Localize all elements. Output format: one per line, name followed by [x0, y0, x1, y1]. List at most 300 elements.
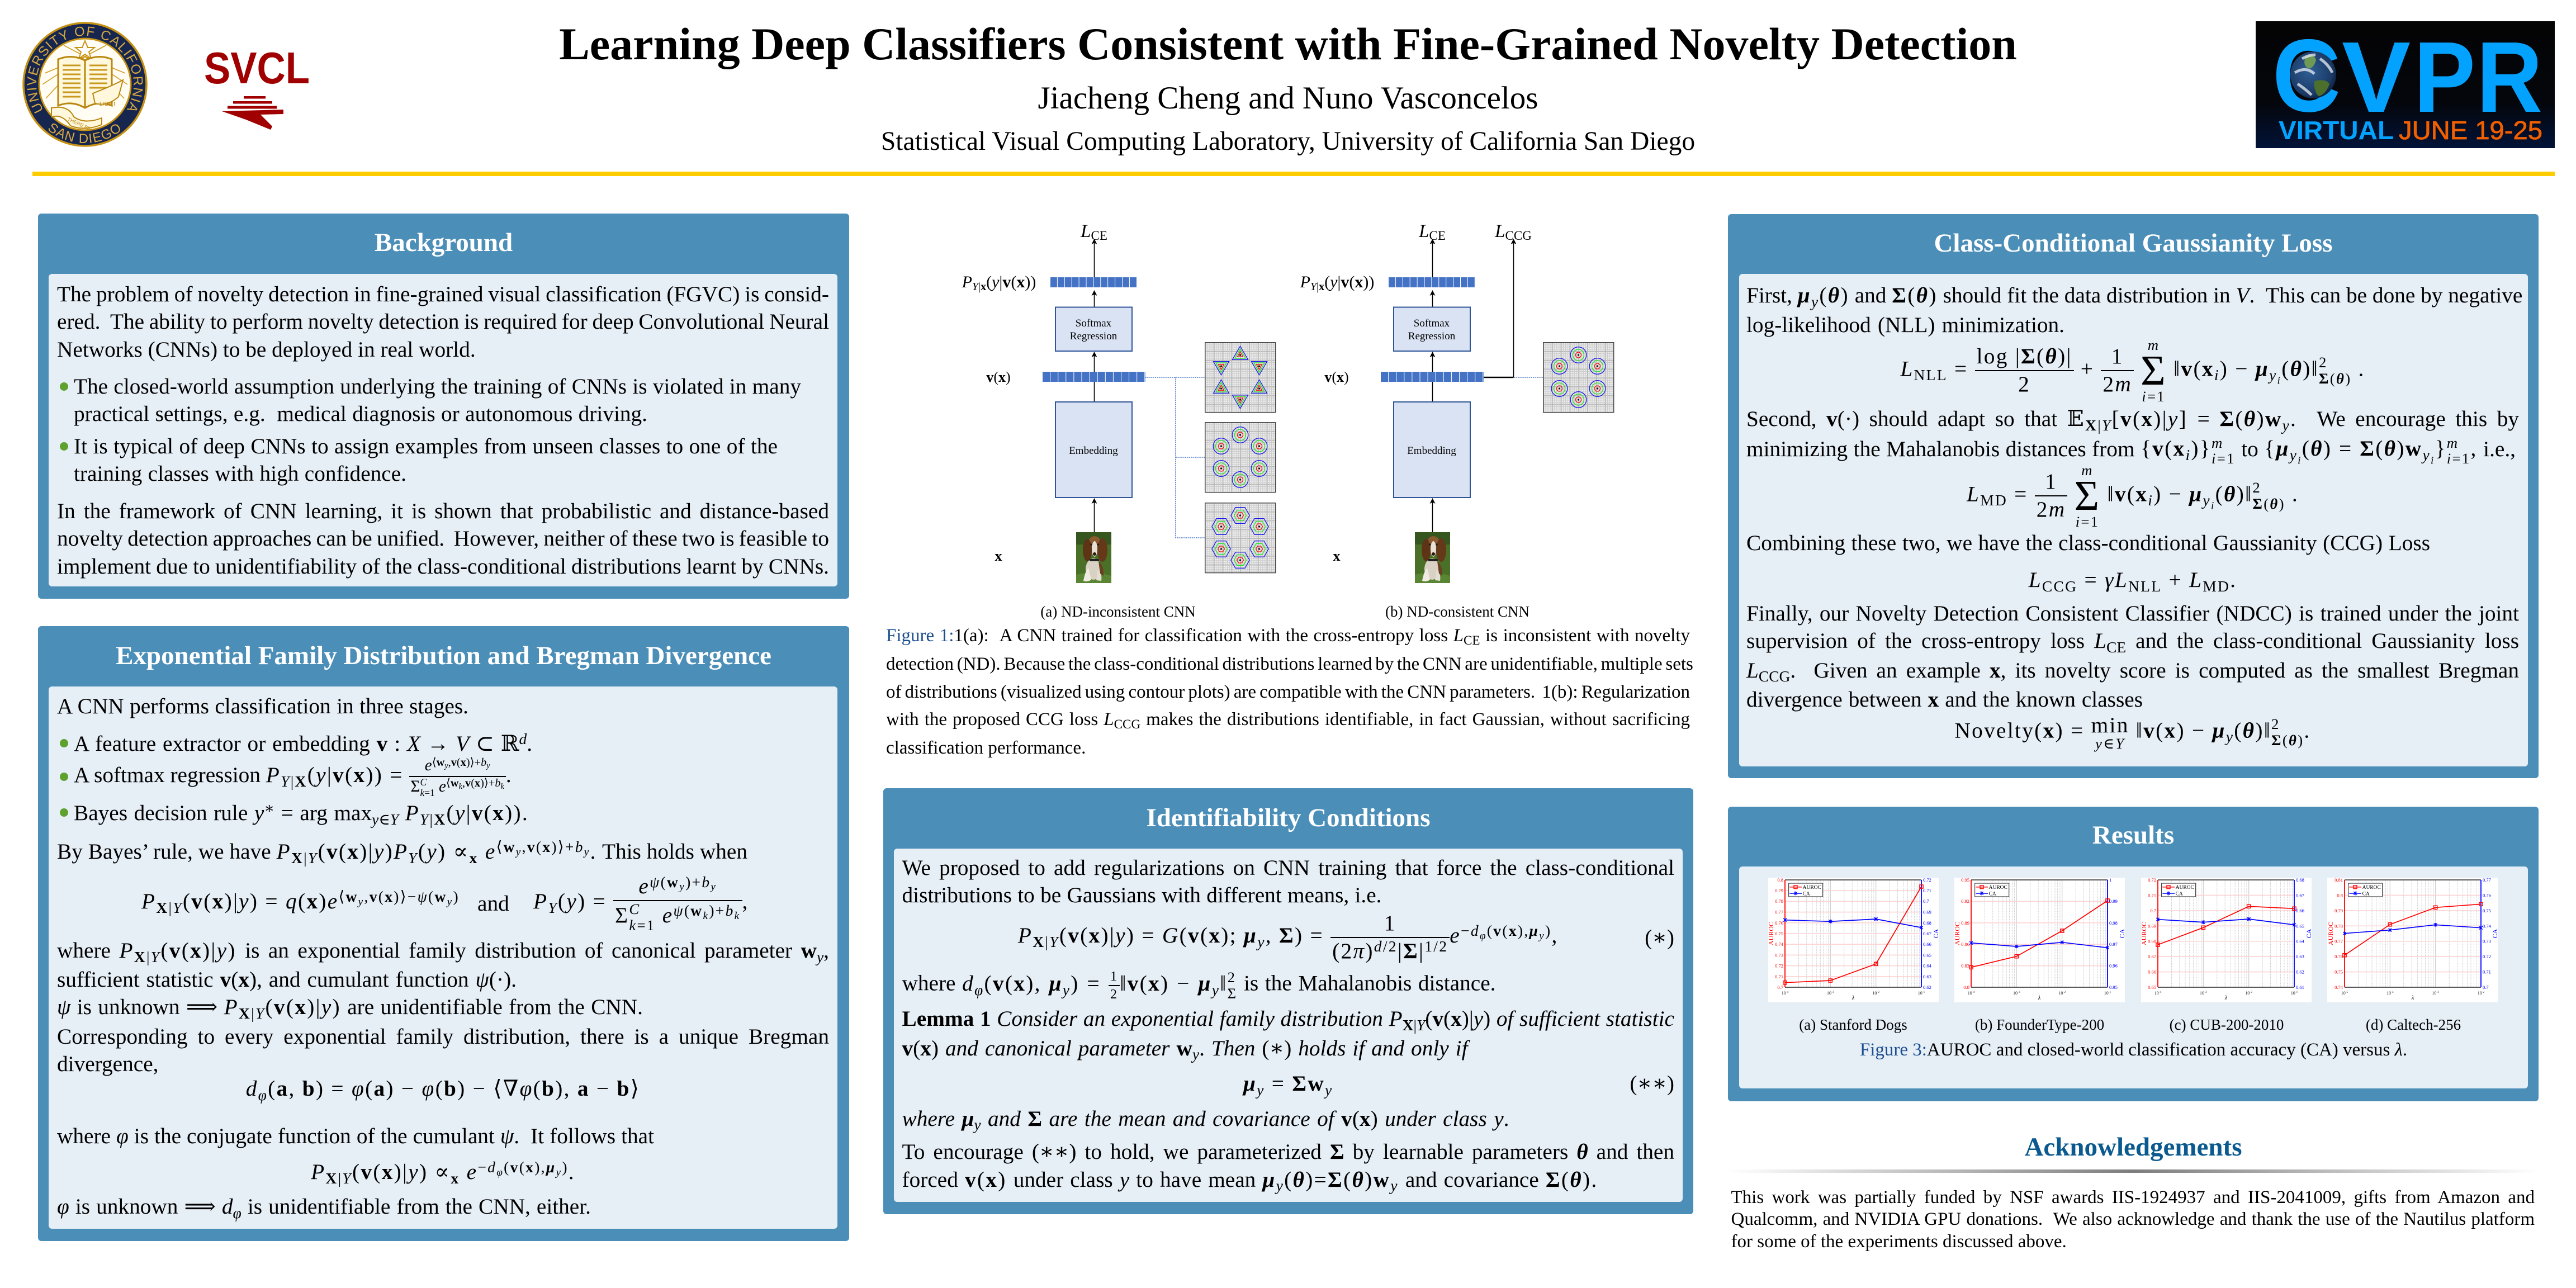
equation: mean condition (**): μy = Σwy: [1243, 1071, 1333, 1098]
equation: novelty score: y∈Y: [2095, 735, 2125, 752]
panel: Exponential Family Distribution and Bregman Divergence: eψ(wy)+by: [638, 873, 717, 898]
chart: Stanford Dogs: 0.62: [1923, 984, 1931, 990]
equation: Bregman divergence: dφ(a, b) = φ(a) − φ(b) − ⟨∇φ(b), a − b⟩: [246, 1076, 640, 1104]
chart: Stanford Dogs: 0.74: [1775, 941, 1784, 947]
text: NDCC training: [1746, 600, 2519, 714]
diagram: ND-inconsistent CNN: Y: [972, 281, 979, 293]
text: regularization proposal: [902, 854, 1674, 910]
chart: Caltech-256: 0.76: [2483, 892, 2491, 898]
text: introduction: The problem of novelty detection in fine-grained visual classification (FGVC) is consid-: [57, 282, 829, 306]
chart: FounderType-200: -1: [2109, 991, 2111, 994]
equation: Gaussian class-conditional (*): (∗): [1645, 925, 1674, 950]
chart: FounderType-200: 10: [2104, 991, 2109, 996]
chart: Stanford Dogs: 0.71: [1775, 974, 1783, 979]
equation: NLL loss: 2: [2319, 354, 2328, 371]
logo: UC San Diego seal: SAN DIEGO: [48, 123, 120, 143]
chart: FounderType-200: AUROC: [1953, 922, 1961, 945]
text: Lemma 1: Lemma 1 Consider an exponential family distribution PX|Y(v(x)|y) of sufficient statistic: [902, 1006, 1674, 1034]
diagram: ND-consistent CNN: CCG: [1505, 229, 1532, 243]
equation: MD loss: [1746, 482, 2519, 510]
chart: Caltech-256: 0.76: [2334, 954, 2343, 959]
equation: MD loss: Σ: [2075, 472, 2100, 519]
equation: mean condition (**): [902, 1069, 1674, 1100]
chart: FounderType-200: λ: [2038, 995, 2041, 1001]
panel: Class-Conditional Gaussianity Loss: [1728, 214, 2539, 778]
diagram: ND-consistent CNN: |x: [1317, 281, 1324, 293]
chart: Caltech-256: -2: [2482, 991, 2485, 994]
diagram: ND-consistent CNN: P: [1300, 273, 1310, 291]
chart: CUB-200-2010: 0.65: [2296, 923, 2304, 929]
text: introduction: ered. The ability to perform novelty detection is required for deep Convolutional Neural: [57, 309, 829, 334]
chart: CUB-200-2010: 0.64: [2296, 939, 2305, 944]
equation: novelty score: 2: [2271, 716, 2280, 732]
chart: CUB-200-2010: 0.63: [2296, 954, 2304, 959]
text: negative log-likelihood: First, μy(θ) and Σ(θ) should fit the data distribution in V. This can be done by negative: [1746, 283, 2522, 310]
chart: FounderType-200: 0.98: [2109, 920, 2118, 926]
equation: NLL loss: LNLL = + ‖v(xi) − μyi(θ)‖ .: [1900, 356, 2365, 386]
chart: CUB-200-2010: 0.72: [2148, 877, 2156, 883]
caption: chart (c): (c) CUB-200-2010: [2170, 1016, 2284, 1033]
text: introduction: [57, 282, 829, 361]
heading: Class-Conditional Gaussianity Loss: Class-Conditional Gaussianity Loss: [1934, 229, 2333, 258]
equation: novelty score: [1746, 718, 2519, 746]
caption: Figure 1: classification performance.: [886, 738, 1086, 758]
equation: class prior: PY(y) = ,: [533, 889, 749, 916]
panel: Results: [1728, 807, 2539, 1101]
chart: Caltech-256: 0.7: [2483, 984, 2489, 990]
chart: FounderType-200: -4: [1972, 991, 1975, 994]
chart: CUB-200-2010: CA: [2305, 929, 2313, 938]
equation: novelty score: Σ(θ): [2271, 732, 2304, 749]
diagram: ND-inconsistent CNN: Embedding: [1069, 445, 1118, 457]
chart: FounderType-200: 0.86: [1961, 941, 1969, 947]
equation: NLL loss: [1746, 357, 2519, 385]
bullet: softmax regression: C: [420, 776, 427, 788]
chart: Stanford Dogs: 10: [1918, 991, 1922, 996]
bullet: softmax regression: e⟨wy,v(x)⟩+by: [425, 756, 490, 774]
chart: CUB-200-2010: AUROC: [2140, 922, 2148, 945]
diagram: ND-consistent CNN: Embedding: [1407, 445, 1456, 457]
panel: Class-Conditional Gaussianity Loss: i=1: [2142, 388, 2166, 405]
chart: Stanford Dogs: 0.76: [1775, 920, 1783, 926]
panel: Background: [38, 214, 849, 599]
bullet: softmax regression: Σ e⟨wk,v(x)⟩+bk: [410, 777, 504, 795]
text: Mahalanobis minimization: [1746, 405, 2519, 470]
equation: MD loss: 2m: [2037, 497, 2066, 522]
text: exponential family explanation: divergence,: [57, 1052, 158, 1076]
text: negative log-likelihood: [1746, 282, 2519, 339]
text: Mahalanobis distance: 1: [1110, 969, 1118, 984]
diagram: ND-consistent CNN: Softmax: [1414, 318, 1450, 329]
chart: Stanford Dogs: 0.64: [1923, 963, 1932, 969]
logo: CVPR virtual June 19-25: JUNE 19-25: [2399, 116, 2542, 145]
text: acknowledgement body: This work was partially funded by NSF awards IIS-1924937 and IIS-2041009, gifts from Amazon and: [1731, 1187, 2535, 1208]
chart: FounderType-200: 0.96: [2109, 963, 2118, 969]
chart: Caltech-256: 0.81: [2334, 877, 2343, 883]
diagram: ND-inconsistent CNN: v(x): [986, 369, 1011, 385]
diagram: ND-consistent CNN: CE: [1429, 229, 1446, 243]
chart: Caltech-256: [2327, 878, 2498, 1002]
chart: FounderType-200: 0.99: [2109, 898, 2118, 904]
chart: FounderType-200: 0.8: [1963, 984, 1969, 990]
chart: FounderType-200: CA: [1989, 891, 1996, 897]
panel: Class-Conditional Gaussianity Loss: 1: [2111, 344, 2124, 368]
text: acknowledgement body: Qualcomm, and NVIDIA GPU donations. We also acknowledge and thank the use of the Nautilus platform: [1731, 1209, 2535, 1229]
caption: Figure 1: detection (ND). Because the class-conditional distributions learned by the CNN are unidentifiable, multiple sets: [886, 654, 1693, 674]
panel: Identifiability Conditions: 1: [1384, 911, 1396, 935]
caption: subfigure (a): (a) ND-inconsistent CNN: [1040, 603, 1196, 620]
chart: Caltech-256: 0.8: [2337, 892, 2343, 898]
caption: chart (d): (d) Caltech-256: [2366, 1016, 2461, 1033]
diagram: ND-consistent CNN: L: [1494, 221, 1505, 242]
equation: proportional form: PX|Y(v(x)|y) ∝x e−dφ(v(x),μy).: [311, 1158, 575, 1187]
chart: Stanford Dogs: 0.8: [1777, 877, 1783, 883]
panel: Class-Conditional Gaussianity Loss: m: [2081, 462, 2094, 479]
heading: Acknowledgements: Acknowledgements: [2024, 1133, 2242, 1162]
bullet: closed-world assumption: The closed-world assumption underlying the training of CNNs is violated in many: [74, 373, 801, 398]
chart: Caltech-256: 0.77: [2334, 939, 2343, 944]
chart: Caltech-256: CA: [2362, 891, 2370, 897]
text: lemma conclusion: where μy and Σ are the mean and covariance of v(x) under class y.: [902, 1106, 1509, 1133]
text: framework: [57, 499, 829, 578]
chart: Caltech-256: 0.74: [2334, 984, 2343, 990]
text: learnable parameters: To encourage (∗∗) to hold, we parameterized Σ by learnable parameters θ and then: [902, 1139, 1674, 1164]
equation: NLL loss: Σ: [2141, 347, 2167, 394]
chart: Stanford Dogs: CA: [1803, 891, 1810, 897]
chart: Stanford Dogs: 10: [1872, 991, 1877, 996]
caption: subfigure (b): (b) ND-consistent CNN: [1385, 603, 1530, 620]
chart: CUB-200-2010: 0.67: [2148, 954, 2156, 959]
chart: Stanford Dogs: 0.72: [1923, 877, 1931, 883]
chart: CUB-200-2010: 10: [2154, 991, 2159, 996]
chart: FounderType-200: 10: [2058, 991, 2063, 996]
chart: Stanford Dogs: AUROC: [1767, 922, 1775, 945]
chart: Caltech-256: 0.74: [2483, 923, 2492, 929]
bullet: closed-world assumption: [60, 373, 801, 426]
caption: Figure 1: of distributions (visualized using contour plots) are compatible with the CNN parameters. 1(b): Regularization: [886, 682, 1690, 702]
panel: Class-Conditional Gaussianity Loss: m: [2148, 337, 2160, 353]
bullet: high confidence: [60, 434, 778, 486]
chart: Caltech-256: CA: [2491, 929, 2499, 938]
equation: CCG loss: LCCG = γLNLL + LMD.: [2029, 567, 2237, 595]
chart: CUB-200-2010: 0.68: [2296, 877, 2304, 883]
chart: Caltech-256: 0.75: [2334, 969, 2343, 975]
panel: Class-Conditional Gaussianity Loss: 1: [2045, 469, 2057, 494]
chart: CUB-200-2010: -1: [2295, 991, 2298, 994]
diagram: ND-inconsistent CNN: [962, 221, 1276, 583]
text: Mahalanobis distance: 2: [1228, 969, 1236, 986]
chart: FounderType-200: 0.95: [2109, 984, 2118, 990]
equation: exponential family decomposition: PX|Y(v(x)|y) = q(x)e⟨wy,v(x)⟩−ψ(wy): [141, 888, 460, 916]
heading: Identifiability Conditions: Identifiability Conditions: [1146, 803, 1430, 832]
bullet: high confidence: training classes with high confidence.: [74, 461, 406, 486]
panel: Exponential Family Distribution and Bregman Divergence: k=1: [420, 787, 435, 798]
chart: CUB-200-2010: 0.71: [2148, 892, 2156, 898]
diagram: ND-inconsistent CNN: |x: [978, 281, 986, 293]
chart: Caltech-256: 0.78: [2334, 923, 2343, 929]
caption: Figure 3: Figure 3:AUROC and closed-world classification accuracy (CA) versus λ.: [1860, 1040, 2407, 1060]
text: conjugate function: where φ is the conjugate function of the cumulant ψ. It follows that: [57, 1124, 654, 1148]
text: Mahalanobis minimization: minimizing the Mahalanobis distances from {v(xi)} to {μyi(θ) = Σ(θ)wyi} , i.e.,: [1746, 436, 2516, 467]
bullet: closed-world assumption: practical settings, e.g. medical diagnosis or autonomous driving.: [74, 401, 647, 426]
chart: CUB-200-2010: 10: [2200, 991, 2204, 996]
chart: Stanford Dogs: 0.65: [1923, 952, 1931, 958]
equation: NLL loss: Σ(θ): [2319, 370, 2351, 387]
logo: CVPR virtual June 19-25: P: [2414, 21, 2475, 134]
text: NDCC training: divergence between x and the known classes: [1746, 687, 2143, 712]
text: framework: In the framework of CNN learning, it is shown that probabilistic and distance-based: [57, 499, 829, 523]
diagram: ND-consistent CNN: (: [1324, 273, 1330, 291]
chart: Stanford Dogs: -4: [1786, 991, 1789, 994]
text: framework: implement due to unidentifiability of the class-conditional distributions learnt by CNNs.: [57, 553, 829, 578]
chart: Caltech-256: 10: [2478, 991, 2482, 996]
text: combining: Combining these two, we have the class-conditional Gaussianity (CCG) Loss: [1746, 531, 2430, 555]
chart: CUB-200-2010: -4: [2159, 991, 2162, 994]
chart: Stanford Dogs: 0.69: [1923, 910, 1931, 915]
chart: FounderType-200: 0.92: [1961, 898, 1969, 904]
chart: CUB-200-2010: 0.69: [2148, 923, 2156, 929]
bullet: Bayes decision rule: Bayes decision rule y∗ = arg maxy∈Y PY|X(y|v(x)).: [74, 799, 529, 828]
diagram: ND-consistent CNN: L: [1418, 221, 1429, 242]
text: acknowledgement body: for some of the experiments discussed above.: [1731, 1231, 2067, 1251]
bullet: softmax regression: [60, 756, 512, 798]
chart: CUB-200-2010: 0.7: [2150, 908, 2156, 913]
chart: CUB-200-2010: CA: [2176, 891, 2183, 897]
chart: CUB-200-2010: 0.61: [2296, 984, 2304, 990]
text: introduction: Networks (CNNs) to be deployed in real world.: [57, 337, 476, 361]
text: Mahalanobis minimization: Second, v(·) should adapt so that 𝔼X|Y[v(x)|y] = Σ(θ)wy. We encourage this by: [1746, 406, 2519, 434]
chart: FounderType-200: 1: [2109, 877, 2111, 883]
equation: MD loss: Σ(θ): [2252, 495, 2285, 512]
heading: exponential family: Exponential Family Distribution and Bregman Divergence: [116, 641, 771, 670]
logo: UC San Diego seal: UNIVERSITY OF CALIFORNIA: [27, 27, 143, 113]
diagram: ND-consistent CNN: Regression: [1408, 330, 1456, 342]
equation label: and: and: [477, 891, 509, 916]
text: Mahalanobis distance: Σ: [1228, 985, 1237, 1002]
figure: CNN diagrams: [883, 218, 1694, 609]
chart: Caltech-256: 0.79: [2334, 908, 2343, 913]
diagram: ND-inconsistent CNN: x: [995, 548, 1002, 564]
caption: chart (b): (b) FounderType-200: [1975, 1016, 2104, 1033]
chart: CUB-200-2010: -3: [2204, 991, 2207, 994]
chart: Stanford Dogs: 0.72: [1775, 963, 1783, 969]
chart: Stanford Dogs: 0.7: [1777, 984, 1783, 990]
chart: Caltech-256: λ: [2411, 995, 2414, 1001]
section: Acknowledgements: [1728, 1129, 2539, 1258]
diagram: ND-consistent CNN: v(x): [1324, 369, 1349, 385]
diagram: ND-consistent CNN: [1300, 221, 1614, 583]
text: exponential family explanation: Corresponding to every exponential family distribution, there is a unique Bregman: [57, 1024, 829, 1049]
chart: CUB-200-2010: λ: [2224, 995, 2228, 1001]
bullet: softmax regression: A softmax regression PY|X(y|v(x)) = .: [74, 763, 512, 790]
text: Lemma 1: [902, 1005, 1674, 1064]
chart: Stanford Dogs: 0.71: [1923, 888, 1931, 893]
text: NDCC training: Finally, our Novelty Detection Consistent Classifier (NDCC) is trained under the joint: [1746, 601, 2519, 626]
equation: MD loss: 2: [2252, 479, 2261, 496]
diagram: ND-inconsistent CNN: y|v(x)): [992, 273, 1036, 291]
logo: UC San Diego seal: LIGHT: [100, 101, 116, 107]
chart: FounderType-200: -3: [2018, 991, 2020, 994]
text: acknowledgement body: [1731, 1186, 2535, 1253]
chart: Stanford Dogs: -2: [1877, 991, 1879, 994]
chart: CUB-200-2010: [2141, 878, 2312, 1002]
heading: Background: Background: [375, 228, 513, 257]
chart: Caltech-256: -3: [2436, 991, 2439, 994]
equation: Gaussian class-conditional (*): [902, 924, 1674, 951]
text: negative log-likelihood: log-likelihood (NLL) minimization.: [1746, 312, 2064, 337]
text: NDCC training: LCCG. Given an example x, its novelty score is computed as the smallest Bregman: [1746, 658, 2519, 685]
bullet: high confidence: It is typical of deep CNNs to assign examples from unseen classes to one of the: [74, 434, 778, 458]
text: three stages: A CNN performs classification in three stages.: [57, 694, 468, 718]
chart: FounderType-200: 0.83: [1961, 963, 1969, 969]
equation: MD loss: LMD = ‖v(xi) − μyi(θ)‖ .: [1967, 481, 2299, 512]
equation: novelty score: min: [2091, 713, 2129, 737]
logo: CVPR virtual June 19-25: [2256, 18, 2555, 148]
panel: Identifiability Conditions: [883, 788, 1693, 1214]
affiliation: Statistical Visual Computing Laboratory, University of California San Diego: [881, 127, 1695, 156]
text: framework: novelty detection approaches can be unified. However, neither of these two is feasible to: [57, 526, 829, 551]
diagram: ND-consistent CNN: y|v(x)): [1330, 273, 1374, 291]
equation: Gaussian class-conditional (*): PX|Y(v(x)|y) = G(v(x); μy, Σ) = e−dφ(v(x),μy),: [1018, 922, 1559, 950]
chart: Stanford Dogs: [1768, 878, 1939, 1002]
chart: Stanford Dogs: 0.78: [1775, 898, 1783, 904]
caption: chart (a): (a) Stanford Dogs: [1799, 1016, 1907, 1033]
chart: Stanford Dogs: 0.68: [1923, 920, 1931, 926]
chart: CUB-200-2010: 0.62: [2296, 969, 2304, 975]
chart: CUB-200-2010: 10: [2245, 991, 2250, 996]
chart: Stanford Dogs: 0.66: [1923, 941, 1931, 947]
text: exponential family explanation: [57, 938, 829, 1076]
chart: Stanford Dogs: 0.75: [1775, 931, 1783, 936]
text: Mahalanobis distance: 2: [1110, 987, 1118, 1002]
chart: Stanford Dogs: 0.67: [1923, 931, 1931, 936]
chart: FounderType-200: 0.95: [1961, 877, 1969, 883]
chart: FounderType-200: [1954, 878, 2125, 1002]
chart: Stanford Dogs: 10: [1782, 991, 1786, 996]
chart: CUB-200-2010: -2: [2250, 991, 2252, 994]
text: exponential family explanation: sufficient statistic v(x), and cumulant function ψ(·).: [57, 967, 517, 992]
caption: Figure 1: with the proposed CCG loss LCCG makes the distributions identifiable, in fact Gaussian, without sacrificing: [886, 709, 1690, 731]
chart: Stanford Dogs: 0.73: [1775, 952, 1783, 958]
chart: Caltech-256: 0.71: [2483, 969, 2491, 975]
chart: Stanford Dogs: 0.77: [1775, 910, 1783, 915]
diagram: ND-inconsistent CNN: Softmax: [1076, 318, 1112, 329]
chart: Caltech-256: 0.77: [2483, 877, 2491, 883]
chart: Stanford Dogs: 10: [1827, 991, 1831, 996]
panel: Exponential Family Distribution and Bregman Divergence: k=1: [629, 917, 656, 934]
panel: Class-Conditional Gaussianity Loss: log |Σ(θ)|: [1977, 344, 2072, 368]
equation: NLL loss: 2: [2018, 372, 2030, 396]
text: unidentifiable divergence: φ is unknown ⟹ dφ is unidentifiable from the CNN, either.: [57, 1194, 591, 1221]
chart: Caltech-256: 0.72: [2483, 954, 2491, 959]
chart: CUB-200-2010: 0.65: [2148, 984, 2156, 990]
authors: Jiacheng Cheng and Nuno Vasconcelos: [1038, 80, 1538, 116]
equation: class prior: C: [629, 901, 640, 917]
logo: SVCL: SVCL: [204, 43, 310, 93]
chart: Caltech-256: 10: [2341, 991, 2346, 996]
chart: FounderType-200: 0.89: [1961, 920, 1969, 926]
panel: Exponential Family Distribution and Bregman Divergence: [38, 626, 849, 1241]
equation: Gaussian class-conditional (*): (2π)d/2|Σ|1/2: [1332, 937, 1448, 963]
chart: Stanford Dogs: 0.7: [1923, 898, 1929, 904]
diagram: ND-consistent CNN: Y: [1310, 281, 1318, 293]
chart: CUB-200-2010: 10: [2291, 991, 2295, 996]
heading: Results: Results: [2092, 821, 2174, 850]
logo: SVCL: [204, 43, 310, 130]
caption: Figure 1: [886, 622, 1690, 762]
chart: FounderType-200: 10: [2013, 991, 2018, 996]
text: Mahalanobis distance: where dφ(v(x), μy) = ‖v(x) − μy‖ is the Mahalanobis distance.: [902, 971, 1495, 998]
logo: CVPR virtual June 19-25: C: [2272, 18, 2341, 134]
equation: NLL loss: 2m: [2103, 372, 2132, 396]
chart: Stanford Dogs: CA: [1932, 929, 1940, 938]
chart: Caltech-256: AUROC: [2327, 922, 2334, 945]
chart: CUB-200-2010: AUROC: [2176, 885, 2194, 891]
text: exponential family explanation: ψ is unknown ⟹ PX|Y(v(x)|y) are unidentifiable from the CNN.: [57, 995, 643, 1022]
chart: CUB-200-2010: 0.66: [2148, 969, 2156, 975]
logo: CVPR virtual June 19-25: R: [2476, 21, 2542, 134]
text: Bayes rule: By Bayes’ rule, we have PX|Y(v(x)|y)PY(y) ∝x e⟨wy,v(x)⟩+by. This holds when: [57, 838, 747, 866]
chart: Stanford Dogs: -3: [1831, 991, 1834, 994]
chart: FounderType-200: 0.97: [2109, 941, 2118, 947]
text: Mahalanobis minimization: m: [2447, 434, 2459, 451]
chart: FounderType-200: CA: [2118, 929, 2126, 938]
diagram: ND-inconsistent CNN: P: [962, 273, 972, 291]
text: Mahalanobis minimization: i=1: [2447, 450, 2471, 467]
chart: FounderType-200: 10: [1968, 991, 1972, 996]
logo: CVPR virtual June 19-25: VIRTUAL: [2279, 116, 2394, 145]
equation: class prior: Σ eψ(wk)+bk: [615, 902, 741, 927]
diagram: ND-inconsistent CNN: L: [1080, 221, 1091, 242]
chart: Stanford Dogs: -1: [1922, 991, 1925, 994]
chart: FounderType-200: -2: [2063, 991, 2066, 994]
text: regularization proposal: distributions to be Gaussians with different means, i.e.: [902, 883, 1382, 907]
title: Learning Deep Classifiers Consistent with Fine-Grained Novelty Detection: [559, 18, 2017, 69]
equation: class prior: [533, 873, 749, 934]
chart: Stanford Dogs: AUROC: [1803, 885, 1821, 891]
text: learnable parameters: [902, 1138, 1674, 1195]
diagram: ND-consistent CNN: x: [1333, 548, 1341, 564]
text: learnable parameters: forced v(x) under class y to have mean μy(θ)=Σ(θ)wy and covariance Σ(θ).: [902, 1167, 1598, 1194]
chart: FounderType-200: AUROC: [1989, 885, 2007, 891]
text: exponential family explanation: where PX|Y(v(x)|y) is an exponential family distribution of canonical parameter wy,: [57, 938, 829, 965]
text: Mahalanobis minimization: m: [2212, 434, 2224, 451]
diagram: ND-inconsistent CNN: (: [986, 273, 992, 291]
caption: Figure 1: Figure 1:1(a): A CNN trained for classification with the cross-entropy loss LCE is inconsistent with novelty: [886, 626, 1690, 647]
text: Mahalanobis minimization: i=1: [2212, 450, 2236, 467]
text: Lemma 1: v(x) and canonical parameter wy. Then (∗) holds if and only if: [902, 1036, 1468, 1063]
logo: CVPR virtual June 19-25: V: [2342, 21, 2411, 134]
equation: novelty score: Novelty(x) = ‖v(x) − μy(θ)‖ .: [1954, 718, 2311, 745]
chart: Caltech-256: AUROC: [2362, 885, 2381, 891]
diagram: ND-inconsistent CNN: Regression: [1070, 330, 1117, 342]
bullet: feature extractor: A feature extractor or embedding v : X → V ⊂ ℝd.: [74, 730, 532, 756]
diagram: ND-inconsistent CNN: CE: [1091, 229, 1107, 243]
chart: Stanford Dogs: 0.63: [1923, 974, 1931, 979]
chart: Stanford Dogs: 0.79: [1775, 888, 1783, 893]
chart: CUB-200-2010: 0.67: [2296, 892, 2304, 898]
panel: Class-Conditional Gaussianity Loss: i=1: [2076, 513, 2099, 530]
chart: CUB-200-2010: 0.68: [2148, 939, 2156, 944]
chart: CUB-200-2010: 0.66: [2296, 908, 2304, 913]
text: NDCC training: supervision of the cross-entropy loss LCE and the class-conditional Gaussianity loss: [1746, 628, 2519, 656]
chart: Caltech-256: 0.75: [2483, 908, 2491, 913]
logo: UC San Diego seal: THERE BE: [67, 116, 92, 132]
chart: Caltech-256: -4: [2391, 991, 2394, 994]
chart: Caltech-256: 0.73: [2483, 939, 2491, 944]
equation: mean condition (**): (∗∗): [1630, 1071, 1674, 1096]
chart: Stanford Dogs: λ: [1852, 995, 1855, 1001]
